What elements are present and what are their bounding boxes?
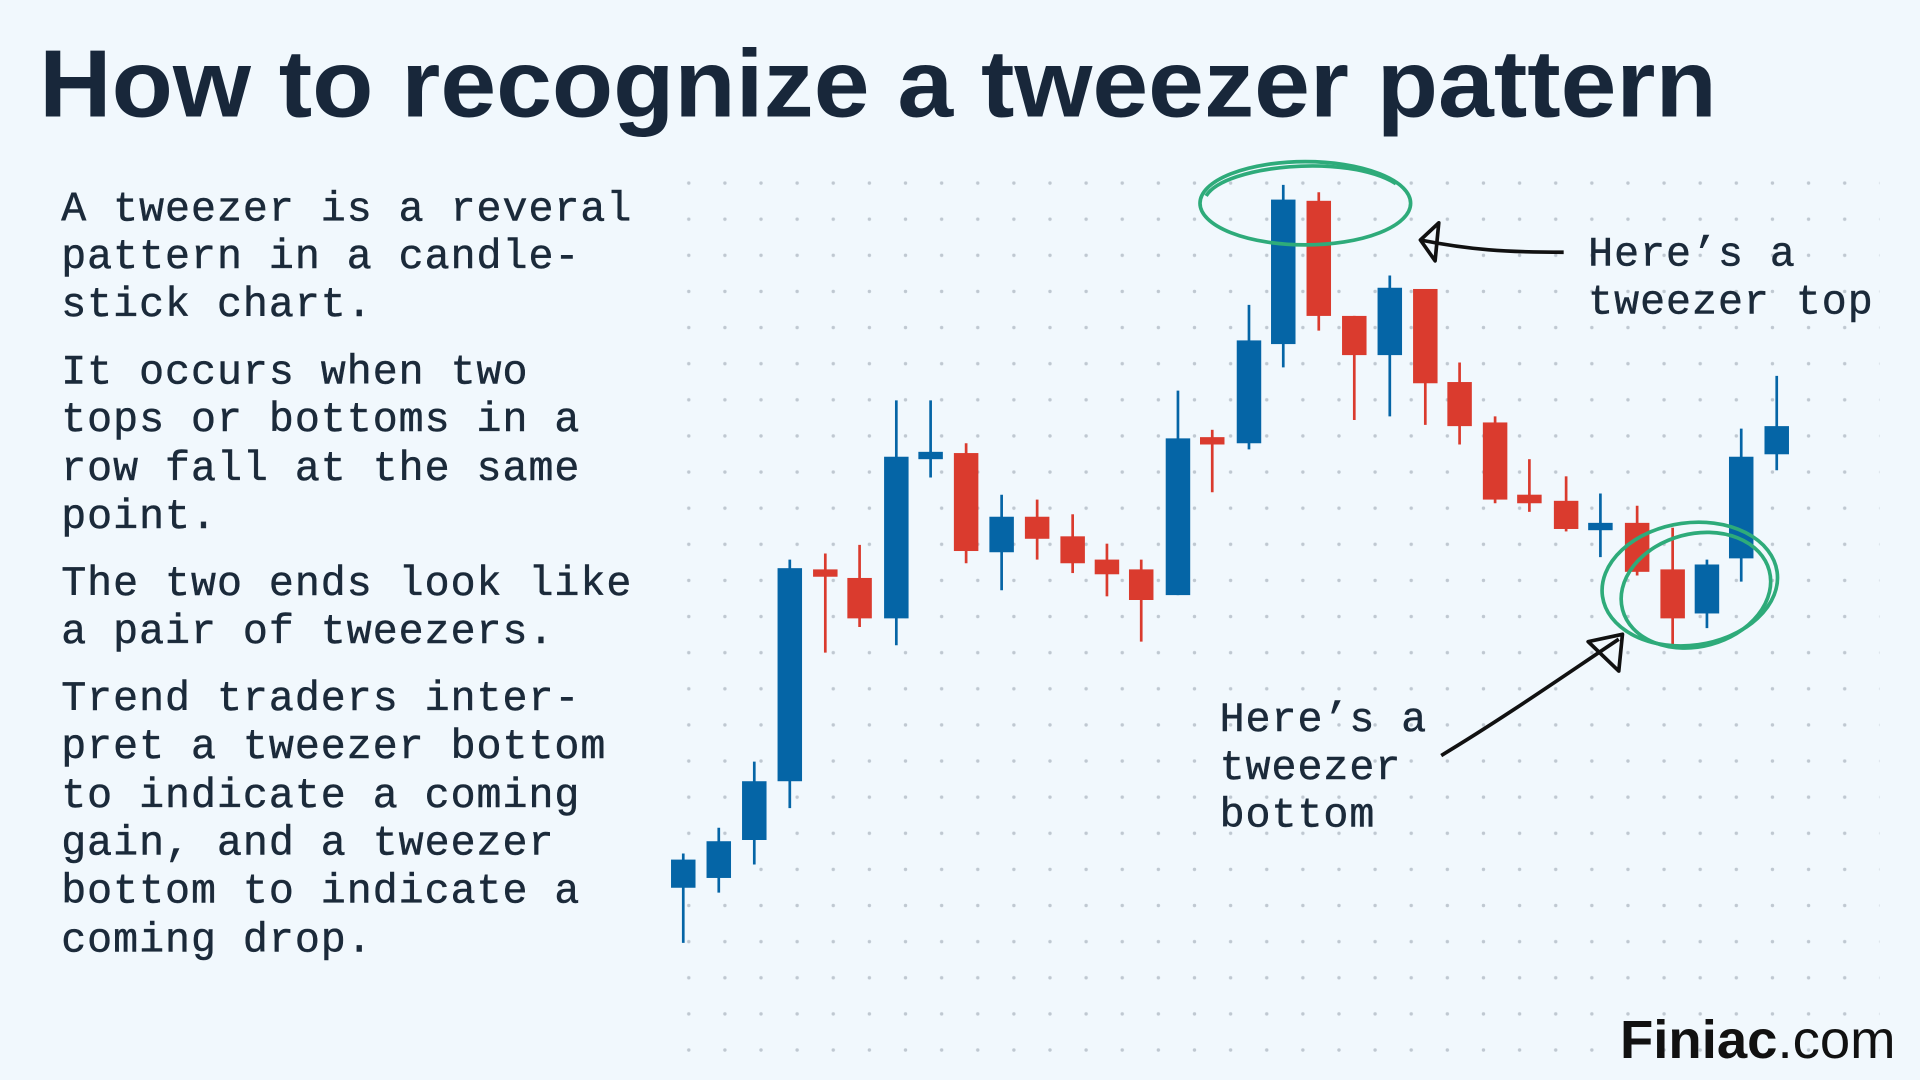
callout: tweezer top — [1588, 231, 1874, 326]
text block: explanation: stick chart. — [61, 281, 373, 329]
text block: explanation: coming drop. — [61, 916, 373, 964]
candlestick chart — [671, 185, 1789, 943]
text block: explanation: to indicate a coming — [61, 772, 580, 820]
text block: explanation: A tweezer is a reveral — [61, 185, 632, 233]
text block: explanation — [61, 185, 632, 964]
highlight: tweezer bottom circle — [1594, 511, 1786, 664]
callout: tweezer bottom: tweezer — [1220, 744, 1401, 792]
text block: explanation: tops or bottoms in a — [61, 396, 580, 444]
text block: explanation: point. — [61, 493, 217, 541]
text block: explanation: row fall at the same — [61, 445, 580, 493]
text block: explanation: bottom to indicate a — [61, 867, 580, 915]
text block: explanation: pret a tweezer bottom — [61, 723, 606, 771]
text block: explanation: The two ends look like — [61, 560, 632, 608]
arrow: to tweezer top — [1420, 223, 1564, 261]
arrow: to tweezer bottom — [1441, 634, 1622, 756]
text block: explanation: a pair of tweezers. — [61, 608, 554, 656]
text block: explanation: pattern in a candle- — [61, 233, 580, 281]
text block: explanation: It occurs when two — [61, 348, 528, 396]
highlight: tweezer top circle — [1200, 162, 1411, 245]
text block: explanation: gain, and a tweezer — [61, 820, 554, 868]
title: How to recognize a tweezer pattern — [39, 31, 1717, 137]
logo: Finiac.com: Finiac.com — [1620, 1010, 1896, 1070]
callout: tweezer bottom — [1220, 696, 1427, 840]
callout: tweezer top: Here’s a — [1588, 231, 1796, 279]
callout: tweezer bottom: bottom — [1220, 792, 1375, 840]
callout: tweezer bottom: Here’s a — [1220, 696, 1427, 744]
callout: tweezer top: tweezer top — [1588, 278, 1874, 326]
text block: explanation: Trend traders inter- — [61, 675, 580, 723]
